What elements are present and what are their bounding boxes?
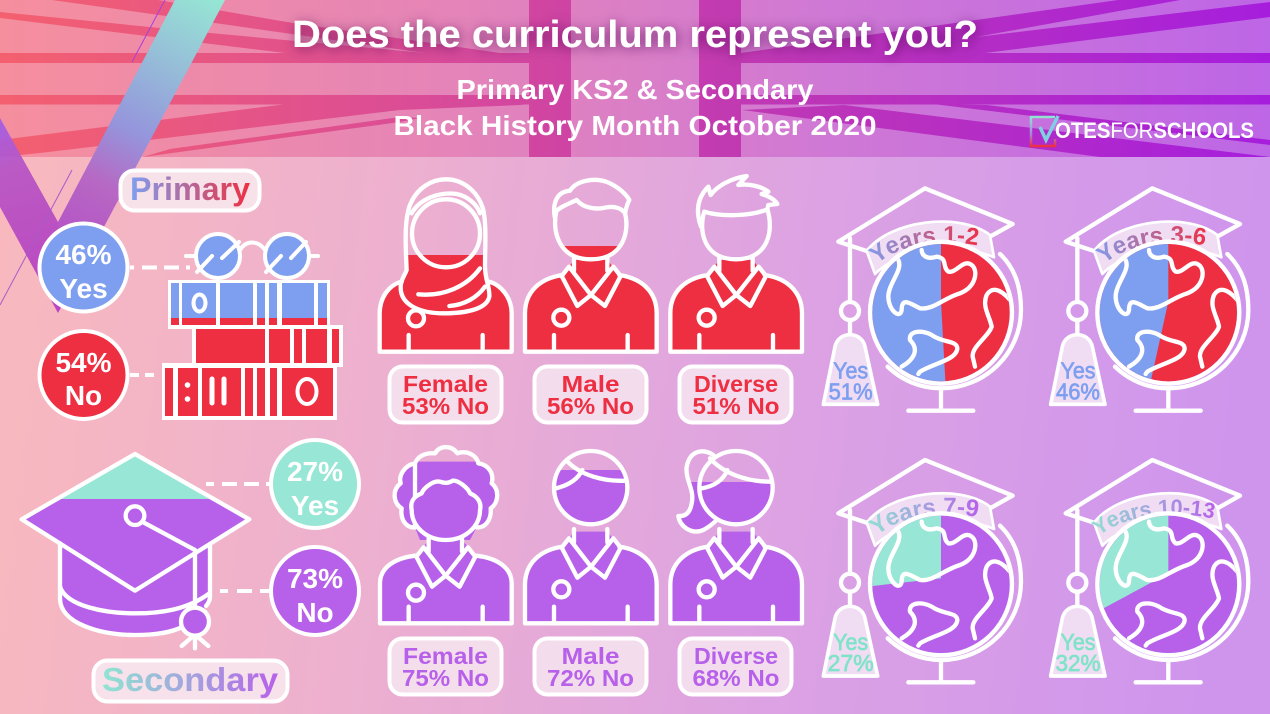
label: secondary male: Male [562, 643, 620, 669]
secondary person: diverse [670, 451, 802, 623]
label: primary diverse [680, 366, 792, 422]
primary person: female [380, 179, 512, 352]
label: Primary: Primary [130, 171, 250, 207]
label: primary female: 53% No [402, 393, 489, 419]
label: secondary female: Female [403, 643, 488, 669]
label: Secondary: Secondary [102, 661, 279, 698]
globe: years 1-2: 51% [829, 378, 873, 404]
label: secondary female: 75% No [402, 665, 489, 691]
globe: years 1-2: Yes [833, 357, 868, 383]
stat: secondary 27% yes: 27% [287, 456, 343, 487]
globe: years 7-9 [822, 458, 1024, 684]
title: Does the curriculum represent you? [292, 14, 978, 56]
globe: years 1-2: Years 1-2 [868, 226, 978, 260]
stat: secondary 27% yes [206, 440, 359, 528]
subtitle: Black History Month October 2020 [394, 110, 876, 141]
label: primary female [390, 366, 502, 422]
header banner [0, 0, 1270, 157]
label: primary diverse: 51% No [692, 393, 780, 419]
label: secondary male: 72% No [547, 665, 634, 691]
stat: secondary 73% no: 73% [287, 563, 343, 594]
stat: primary 54% no: No [65, 380, 102, 411]
globe: years 10-13: Years 10-13 [1090, 499, 1215, 532]
globe: years 7-9: Yes [833, 629, 868, 655]
glasses [186, 234, 318, 278]
stat: primary 46% yes: 46% [55, 239, 112, 270]
secondary person: female [380, 447, 512, 623]
stat: secondary 73% no: No [296, 597, 334, 628]
label: primary diverse: Diverse [694, 371, 778, 397]
decorative V tick [0, 0, 225, 313]
globe: years 10-13: Yes [1060, 629, 1095, 655]
label: primary male [534, 366, 646, 422]
label: primary female: Female [403, 371, 488, 397]
label: secondary diverse [680, 638, 792, 694]
label: primary male: 56% No [547, 393, 634, 419]
label: secondary female [390, 638, 502, 694]
book stack [162, 280, 343, 420]
icon: graduation cap [22, 454, 249, 648]
secondary person: male [525, 451, 657, 623]
label: secondary male [534, 638, 646, 694]
globe: years 1-2 [822, 186, 1024, 413]
globe: years 7-9: Years 7-9 [868, 498, 978, 532]
globe: years 10-13 [1048, 458, 1250, 684]
stat: secondary 27% yes: Yes [291, 490, 339, 521]
primary person: male [525, 180, 657, 352]
primary person: diverse [670, 176, 802, 352]
icon: glasses and books [162, 234, 343, 420]
label: secondary diverse: Diverse [694, 643, 778, 669]
globe: years 3-6 [1048, 186, 1250, 413]
globe: years 3-6: Years 3-6 [1094, 226, 1206, 260]
stat: primary 54% no: 54% [55, 347, 112, 378]
stat: secondary 73% no [220, 547, 359, 635]
stat: primary 54% no [40, 331, 156, 419]
globe: years 10-13: 32% [1055, 650, 1100, 676]
subtitle [394, 74, 876, 141]
stat: primary 46% yes: Yes [59, 273, 108, 304]
stat: primary 46% yes [40, 224, 192, 312]
globe: years 3-6: Yes [1060, 357, 1095, 383]
globe: years 3-6: 46% [1056, 378, 1100, 404]
subtitle: Primary KS2 & Secondary [456, 74, 814, 105]
logo: OTESFORSCHOOLS [1055, 118, 1254, 143]
label: primary male: Male [562, 371, 620, 397]
globe: years 7-9: 27% [828, 650, 874, 676]
label: secondary diverse: 68% No [692, 665, 780, 691]
